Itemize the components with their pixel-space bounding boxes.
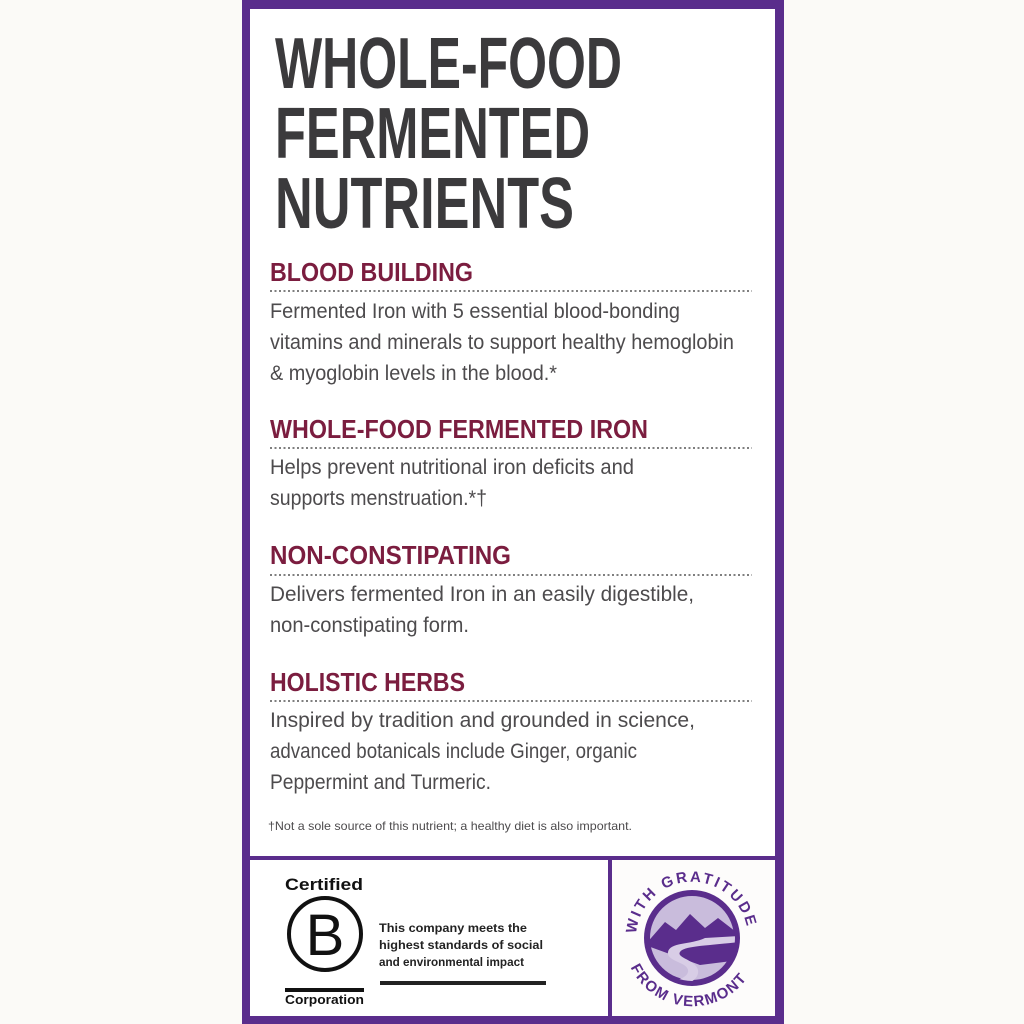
icon: with gratitude from vermont badge	[626, 872, 757, 1006]
section: blood building: & myoglobin levels in the blood.*	[270, 362, 557, 385]
icon: with gratitude from vermont badge: WITH GRATITUDE	[626, 872, 757, 932]
section: non-constipating: NON-CONSTIPATING	[270, 540, 511, 570]
section: whole-food fermented iron: Helps prevent nutritional iron deficits and	[270, 456, 634, 479]
section: holistic herbs: HOLISTIC HERBS	[270, 667, 465, 697]
section: whole-food fermented iron	[270, 414, 752, 510]
title: NUTRIENTS	[275, 164, 574, 244]
section: blood building: vitamins and minerals to support healthy hemoglobin	[270, 331, 734, 354]
B Corp logo	[285, 875, 364, 1007]
section: blood building: BLOOD BUILDING	[270, 257, 473, 287]
section: holistic herbs: advanced botanicals include Ginger, organic	[270, 740, 637, 763]
section: blood building	[270, 257, 752, 385]
title	[275, 24, 622, 244]
title: WHOLE-FOOD	[275, 24, 622, 104]
B Corp logo: B	[306, 903, 344, 968]
title: FERMENTED	[275, 94, 590, 174]
B Corp statement: highest standards of social	[379, 940, 543, 952]
section: blood building: Fermented Iron with 5 essential blood-bonding	[270, 300, 680, 323]
B Corp logo: Corporation	[285, 992, 364, 1007]
section: non-constipating: Delivers fermented Iron in an easily digestible,	[270, 583, 694, 606]
B Corp statement	[379, 923, 546, 985]
section: holistic herbs: Inspired by tradition and grounded in science,	[270, 709, 695, 732]
section: non-constipating: non-constipating form.	[270, 614, 469, 637]
section: whole-food fermented iron: supports menstruation.*†	[270, 487, 487, 510]
section: holistic herbs	[270, 667, 752, 794]
B Corp logo: Certified	[285, 875, 363, 894]
section: whole-food fermented iron: WHOLE-FOOD FERMENTED IRON	[270, 414, 648, 444]
section: non-constipating	[270, 540, 752, 637]
B Corp statement: This company meets the	[379, 923, 527, 935]
footnote: †Not a sole source of this nutrient; a healthy diet is also important.	[268, 819, 632, 833]
section: holistic herbs: Peppermint and Turmeric.	[270, 771, 491, 794]
B Corp statement: and environmental impact	[379, 957, 524, 969]
icon: with gratitude from vermont badge: FROM VERMONT	[630, 963, 744, 1006]
purple frame panel	[242, 0, 784, 1024]
